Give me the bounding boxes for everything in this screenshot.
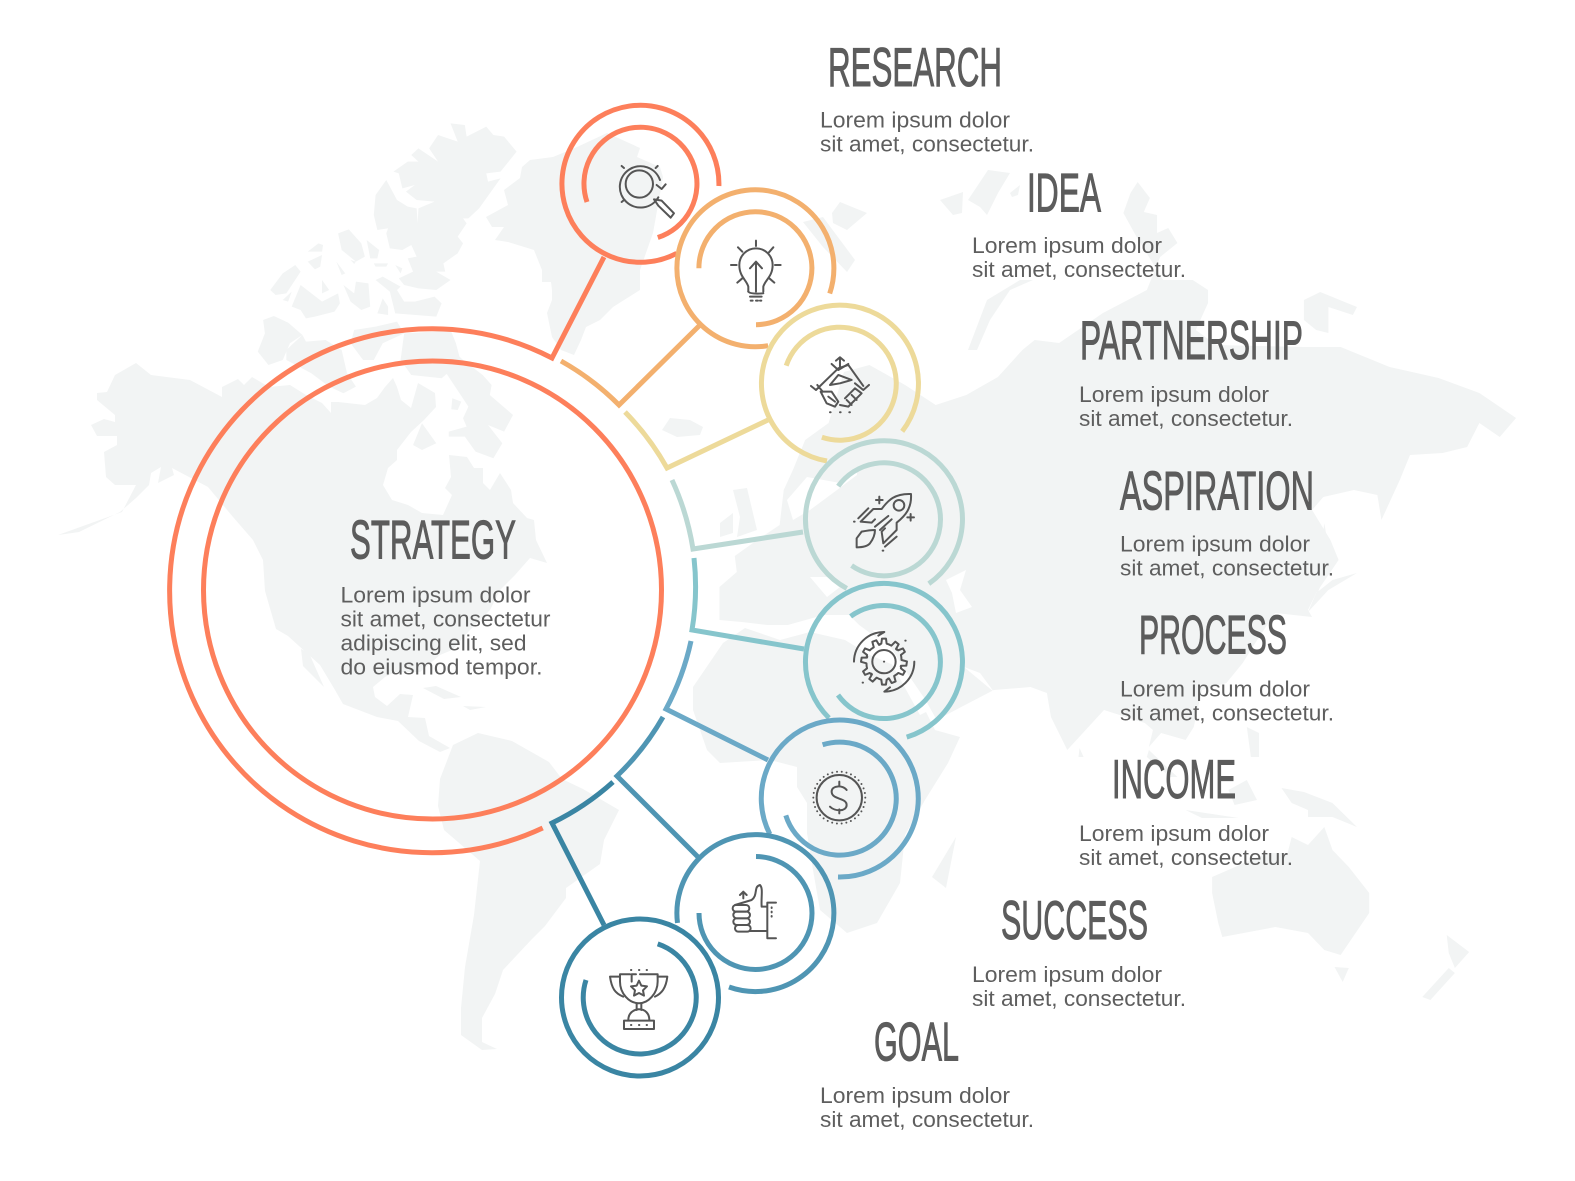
connector: income [666, 641, 768, 760]
heading: aspiration: ASPIRATION [1120, 460, 1314, 522]
icon: trophy [610, 970, 667, 1029]
panel: process [692, 558, 1334, 737]
rings: income [761, 720, 918, 877]
panel: idea [561, 162, 1186, 405]
text: aspiration description [1120, 532, 1334, 580]
text: success description [972, 962, 1186, 1011]
text: success description: Lorem ipsum dolor [972, 962, 1163, 987]
heading: research: RESEARCH [828, 36, 1002, 98]
text: idea description: sit amet, consectetur. [972, 257, 1186, 282]
text: strategy description [340, 582, 551, 680]
connector: aspiration [672, 480, 803, 549]
heading: process: PROCESS [1139, 604, 1287, 666]
heading: income: INCOME [1112, 748, 1236, 810]
text: strategy description: Lorem ipsum dolor [340, 582, 531, 608]
text: research description: Lorem ipsum dolor [820, 108, 1011, 132]
text: partnership description [1079, 382, 1293, 431]
heading: idea: IDEA [1027, 162, 1101, 224]
text: goal description [820, 1083, 1034, 1132]
panel: partnership [625, 305, 1303, 468]
heading: strategy: STRATEGY [350, 508, 516, 570]
ring: central circle [204, 361, 662, 819]
icon: gear with arrows [854, 632, 914, 692]
panel: strategy hub [204, 361, 662, 819]
text: process description: Lorem ipsum dolor [1120, 676, 1311, 702]
text: partnership description: sit amet, consectetur. [1079, 406, 1293, 431]
text: aspiration description: Lorem ipsum dolor [1120, 532, 1311, 556]
text: income description: sit amet, consectetur. [1079, 845, 1293, 870]
connector: research [170, 257, 604, 853]
icon: rocket [854, 494, 914, 551]
rings: process [805, 583, 962, 737]
panel: goal [552, 782, 1034, 1132]
heading: partnership: PARTNERSHIP [1080, 309, 1303, 371]
text: strategy description: sit amet, consectetur [340, 606, 551, 632]
panel: aspiration [672, 441, 1334, 588]
background world map [58, 123, 1516, 1050]
text: idea description: Lorem ipsum dolor [972, 233, 1163, 258]
rings: partnership [761, 305, 918, 461]
rings: goal [562, 919, 718, 1076]
connector: success [617, 717, 698, 857]
text: strategy description: adipiscing elit, sed [340, 630, 526, 656]
heading: goal: GOAL [874, 1010, 959, 1072]
text: success description: sit amet, consectetur. [972, 986, 1186, 1011]
icon: dollar coin [813, 772, 865, 824]
text: idea description [972, 233, 1186, 282]
rings: research [562, 105, 719, 262]
text: research description: sit amet, consectetur. [820, 132, 1034, 156]
text: process description: sit amet, consectetur. [1120, 700, 1334, 726]
rings: idea [677, 190, 834, 347]
text: partnership description: Lorem ipsum dolor [1079, 382, 1270, 407]
text: goal description: sit amet, consectetur. [820, 1107, 1034, 1132]
icon: handshake [811, 357, 869, 412]
text: income description: Lorem ipsum dolor [1079, 821, 1270, 846]
rings: success [677, 835, 834, 992]
text: strategy description: do eiusmod tempor. [340, 654, 542, 680]
text: income description [1079, 821, 1293, 870]
connector: process [692, 558, 804, 649]
text: goal description: Lorem ipsum dolor [820, 1083, 1011, 1108]
text: aspiration description: sit amet, consectetur. [1120, 556, 1334, 580]
icon: thumbs up [733, 885, 776, 938]
panel: research [170, 36, 1034, 853]
connector: partnership [625, 412, 768, 468]
icon: magnifier with arrow [620, 166, 674, 218]
panel: income [666, 641, 1293, 877]
text: research description [820, 108, 1034, 156]
connector: idea [561, 325, 700, 405]
text: process description [1120, 676, 1334, 726]
heading: success: SUCCESS [1001, 889, 1148, 951]
rings: aspiration [805, 441, 962, 588]
icon: light bulb [731, 241, 781, 301]
panel: success [617, 717, 1186, 1011]
connector: goal [552, 782, 613, 925]
